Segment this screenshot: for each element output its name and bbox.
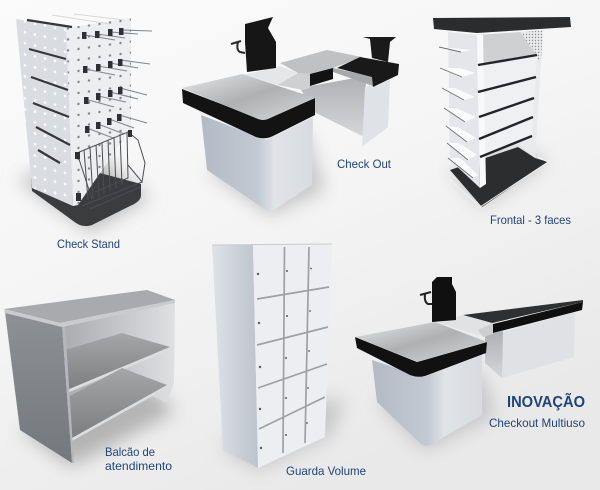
left panel	[448, 32, 480, 188]
monitor	[432, 277, 456, 322]
black band	[182, 89, 315, 138]
top canopy	[433, 17, 571, 33]
right body	[502, 312, 575, 378]
wire basket	[77, 132, 145, 209]
product: checkout multiuso	[355, 277, 583, 450]
door dividers	[257, 247, 329, 453]
top rods	[52, 14, 124, 24]
conveyor band	[493, 302, 583, 333]
black band	[355, 337, 487, 377]
label: Check Out: Check Out	[337, 157, 392, 171]
interior	[300, 76, 366, 136]
left shelves	[439, 47, 478, 178]
right leg	[362, 80, 390, 147]
left shelf front edges	[439, 47, 473, 178]
right monitor	[363, 37, 396, 62]
top edge	[212, 244, 332, 245]
front	[253, 244, 332, 468]
front panel opening edge	[477, 35, 486, 188]
front body	[201, 115, 313, 211]
base	[31, 165, 141, 226]
base	[450, 147, 548, 207]
lower shelf	[68, 368, 167, 438]
front panel	[66, 18, 131, 206]
side	[212, 245, 258, 468]
door locks	[257, 268, 312, 449]
peg mounts	[82, 28, 124, 133]
right black shelf	[337, 57, 399, 87]
right back panel	[520, 30, 543, 158]
label: Balcão de atendimento: atendimento	[105, 459, 172, 473]
base outline	[449, 157, 548, 207]
label: Balcão de atendimento: Balcão de	[105, 445, 155, 459]
slab side with holes	[478, 323, 493, 337]
counter top	[355, 322, 487, 361]
slab side strip	[277, 73, 310, 90]
conveyor top	[463, 300, 583, 323]
front edge	[62, 324, 74, 463]
upper shelf	[65, 333, 170, 390]
label: Check Stand: Check Stand	[57, 237, 120, 251]
top	[4, 290, 175, 323]
product: balcão de atendimento	[4, 290, 175, 466]
product: check out	[182, 17, 399, 215]
middle slab	[243, 66, 298, 85]
left shelf slots	[27, 20, 72, 163]
interior back	[62, 300, 175, 440]
middle slab	[438, 315, 492, 337]
label: Balcão de atendimento	[105, 445, 172, 473]
label: Checkout Multiuso: Checkout Multiuso	[489, 416, 585, 430]
label: Frontal - 3 faces: Frontal - 3 faces	[490, 213, 571, 227]
left side	[5, 312, 72, 463]
left monitor	[245, 17, 276, 72]
product: frontal 3 faces	[433, 17, 571, 207]
front upper void	[477, 32, 537, 65]
scanner	[231, 41, 245, 53]
label: INOVAÇÃO: INOVAÇÃO	[507, 393, 585, 411]
front shelf bars	[478, 55, 537, 157]
product: guarda volume	[212, 244, 345, 470]
drawer	[333, 68, 375, 86]
peg hooks	[85, 30, 152, 138]
scanner	[420, 292, 432, 304]
inner opening	[485, 331, 503, 378]
left panel	[16, 19, 73, 206]
back counter top	[280, 50, 362, 74]
front panel	[477, 55, 537, 157]
label: Guarda Volume: Guarda Volume	[286, 464, 366, 478]
product: check stand	[16, 14, 152, 232]
black drawer panel	[310, 68, 333, 86]
body	[372, 355, 482, 446]
counter top	[182, 74, 315, 120]
